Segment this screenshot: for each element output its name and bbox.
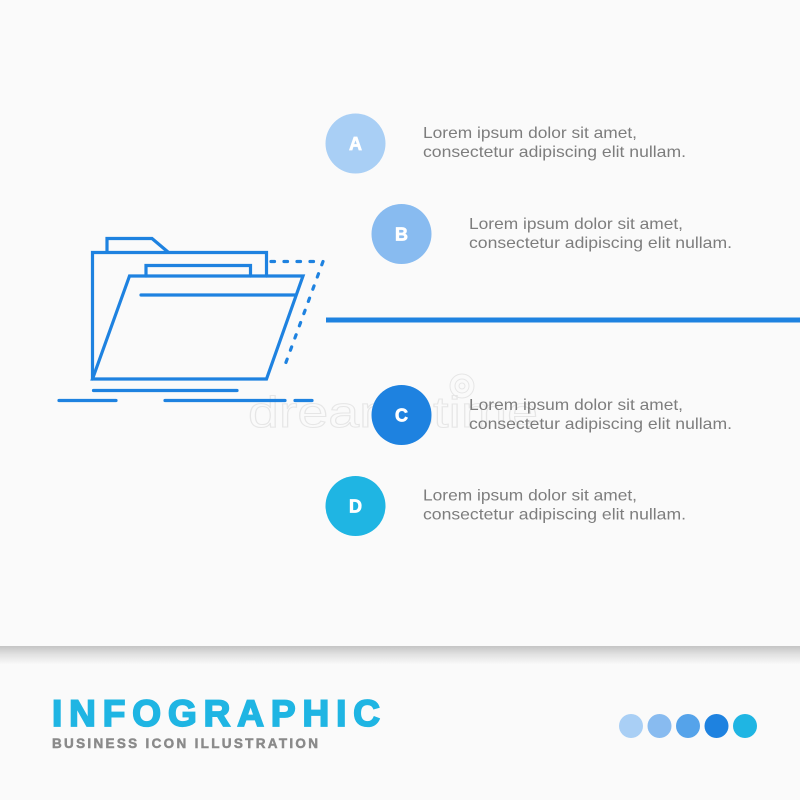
text D: Lorem ipsum dolor sit amet, bbox=[423, 488, 637, 504]
text A bbox=[423, 125, 686, 161]
step B bbox=[372, 204, 732, 264]
step C bbox=[372, 385, 732, 445]
footer shadow band bbox=[0, 646, 800, 665]
badge B bbox=[372, 204, 432, 264]
badge B: B bbox=[395, 224, 408, 244]
subtitle: BUSINESS ICON ILLUSTRATION bbox=[52, 736, 318, 751]
watermark bbox=[248, 374, 538, 437]
text D: consectetur adipiscing elit nullam. bbox=[423, 506, 686, 524]
badge A: A bbox=[349, 134, 362, 154]
text C: Lorem ipsum dolor sit amet, bbox=[469, 397, 683, 414]
text B bbox=[469, 216, 732, 252]
text C: consectetur adipiscing elit nullam. bbox=[469, 416, 732, 433]
badge D: D bbox=[349, 496, 362, 516]
text A: consectetur adipiscing elit nullam. bbox=[423, 144, 686, 161]
text B: Lorem ipsum dolor sit amet, bbox=[469, 216, 683, 233]
badge A bbox=[326, 114, 386, 174]
palette dots bbox=[619, 714, 757, 738]
step A bbox=[326, 114, 686, 174]
connector line bbox=[326, 318, 800, 322]
badge D bbox=[326, 476, 386, 536]
text D bbox=[423, 488, 686, 524]
icon: open folder bbox=[59, 238, 323, 400]
text C bbox=[469, 397, 732, 433]
step D bbox=[326, 476, 686, 536]
text A: Lorem ipsum dolor sit amet, bbox=[423, 125, 637, 142]
badge C bbox=[372, 385, 432, 445]
text B: consectetur adipiscing elit nullam. bbox=[469, 235, 732, 252]
badge C: C bbox=[395, 406, 408, 426]
watermark: dreamstime bbox=[248, 388, 538, 437]
title: INFOGRAPHIC bbox=[52, 693, 380, 734]
